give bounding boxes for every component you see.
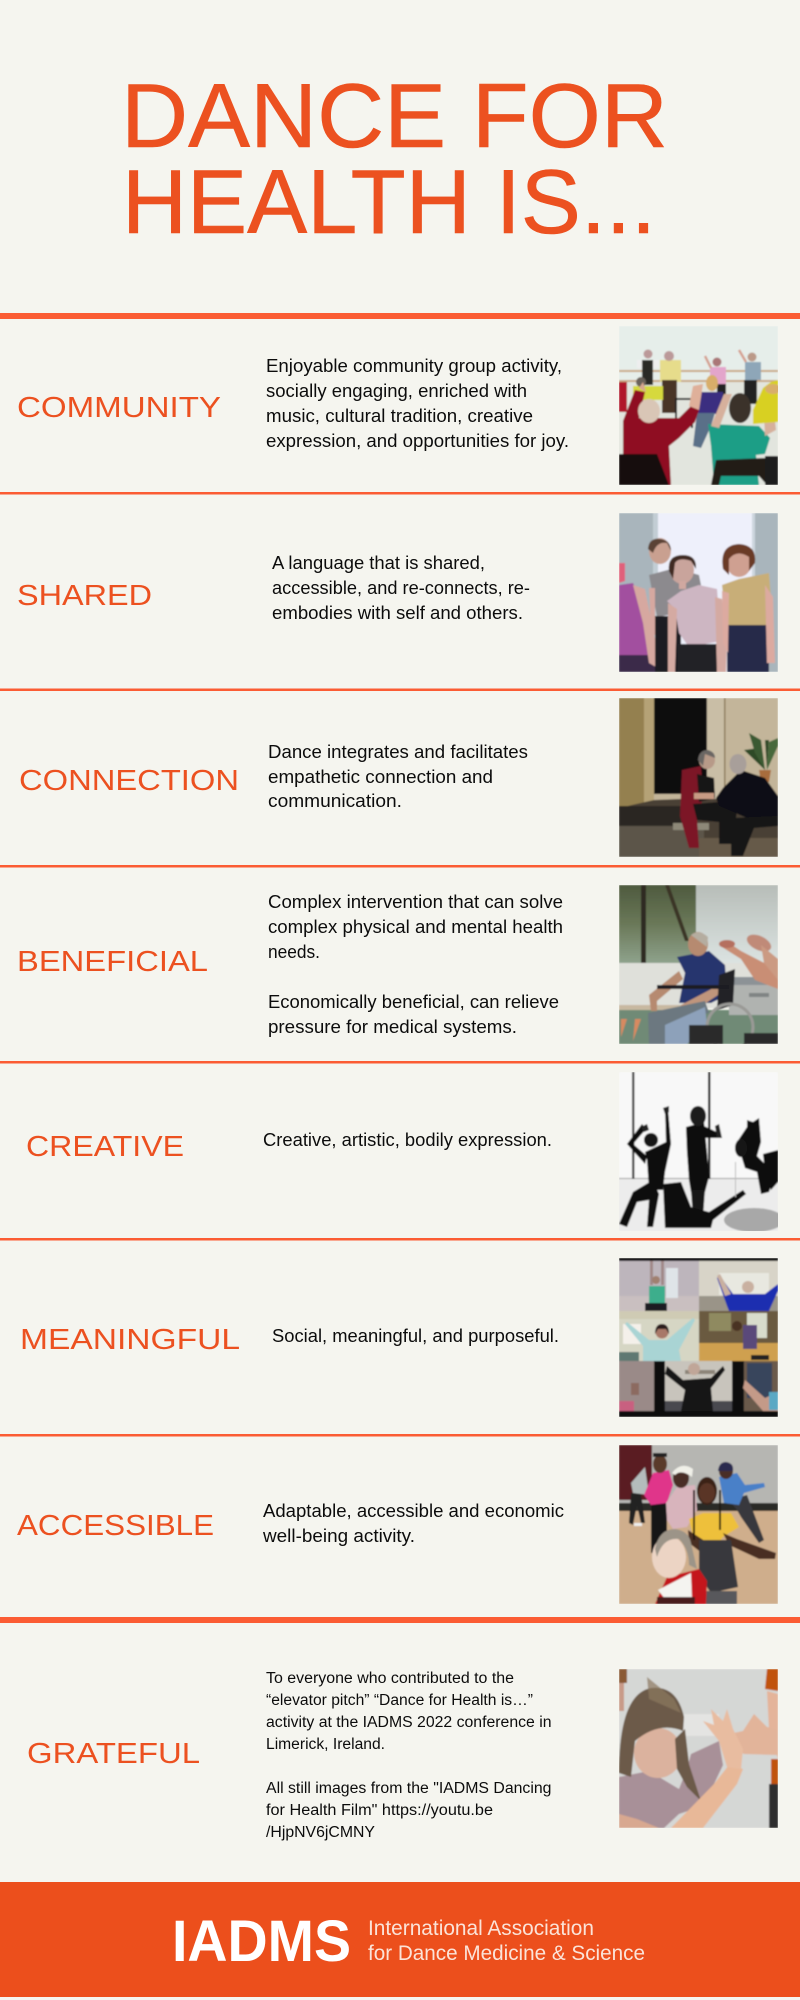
text block: grateful: Limerick, Ireland.	[266, 1736, 385, 1753]
panel: creative	[26, 1072, 784, 1232]
text block: shared: accessible, and re-connects, re-	[272, 578, 530, 598]
image: young woman dancing with raised hand	[619, 1669, 778, 1828]
text block: beneficial: Economically beneficial, can relieve	[268, 992, 559, 1012]
heading: shared: SHARED	[17, 580, 152, 612]
panel: community	[17, 326, 781, 485]
text block: grateful: /HjpNV6jCMNY	[266, 1824, 375, 1841]
text block: beneficial: pressure for medical systems.	[268, 1017, 517, 1037]
text block: accessible: Adaptable, accessible and economic	[263, 1501, 564, 1521]
text block: connection: communication.	[268, 791, 402, 811]
image: dancers standing by window	[619, 513, 778, 672]
text block: beneficial: Complex intervention that can solve	[268, 892, 563, 912]
title	[121, 66, 668, 253]
heading: grateful: GRATEFUL	[27, 1738, 200, 1770]
title: HEALTH IS...	[122, 152, 656, 253]
text block: grateful: To everyone who contributed to the	[266, 1670, 514, 1687]
text block: grateful: “elevator pitch” “Dance for Health is…”	[266, 1692, 533, 1709]
heading: creative: CREATIVE	[26, 1131, 184, 1163]
text block: beneficial: needs.	[268, 942, 320, 962]
panel: accessible	[17, 1445, 778, 1604]
image: children dancing	[619, 1445, 778, 1604]
image: two seated dancers in stone hall	[619, 698, 778, 857]
logo wordmark: IADMS: IADMS	[172, 1909, 351, 1974]
text block: connection	[268, 742, 528, 811]
text block: community: Enjoyable community group activity,	[266, 356, 562, 376]
footer banner	[0, 1882, 800, 1997]
text block: shared	[272, 553, 530, 623]
logo text: organisation name: for Dance Medicine & Science	[368, 1942, 645, 1965]
text block: shared: embodies with self and others.	[272, 603, 523, 623]
logo text: organisation name: International Association	[368, 1917, 594, 1940]
text block: creative: Creative, artistic, bodily expression.	[263, 1130, 552, 1150]
title: DANCE FOR	[121, 66, 668, 167]
text block: community	[266, 356, 569, 451]
text block: accessible	[262, 1501, 564, 1546]
heading: beneficial: BENEFICIAL	[17, 946, 208, 978]
heading: accessible: ACCESSIBLE	[17, 1510, 214, 1542]
text block: grateful	[266, 1670, 552, 1841]
text block: meaningful: Social, meaningful, and purposeful.	[272, 1326, 559, 1346]
text block: connection: empathetic connection and	[268, 767, 493, 787]
logo text: organisation name	[368, 1917, 645, 1965]
text block: shared: A language that is shared,	[272, 553, 485, 573]
image: video call grid of dancers	[619, 1258, 778, 1417]
image: seated group raising arms in studio	[619, 326, 778, 485]
heading: community: COMMUNITY	[17, 392, 221, 424]
heading: connection: CONNECTION	[19, 765, 239, 797]
image: man in wheelchair dancing	[619, 885, 778, 1044]
panel: meaningful	[20, 1258, 778, 1417]
text block: connection: Dance integrates and facilitates	[268, 742, 528, 762]
image: silhouetted dancers	[619, 1072, 778, 1231]
text block: beneficial	[268, 892, 563, 1037]
panel: connection	[19, 698, 778, 857]
text block: accessible: well-being activity.	[262, 1526, 415, 1546]
text block: grateful: activity at the IADMS 2022 conference in	[266, 1714, 552, 1731]
text block: grateful: All still images from the "IADMS Dancing	[266, 1780, 552, 1797]
panel: beneficial	[17, 885, 778, 1050]
text block: beneficial: complex physical and mental health	[268, 917, 563, 937]
panel: grateful	[27, 1669, 778, 1841]
text block: community: expression, and opportunities for joy.	[266, 431, 569, 451]
text block: community: music, cultural tradition, creative	[266, 406, 533, 426]
text block: grateful: for Health Film" https://youtu.be	[266, 1802, 493, 1819]
text block: community: socially engaging, enriched with	[266, 381, 527, 401]
panel: shared	[17, 513, 778, 672]
heading: meaningful: MEANINGFUL	[20, 1324, 240, 1356]
